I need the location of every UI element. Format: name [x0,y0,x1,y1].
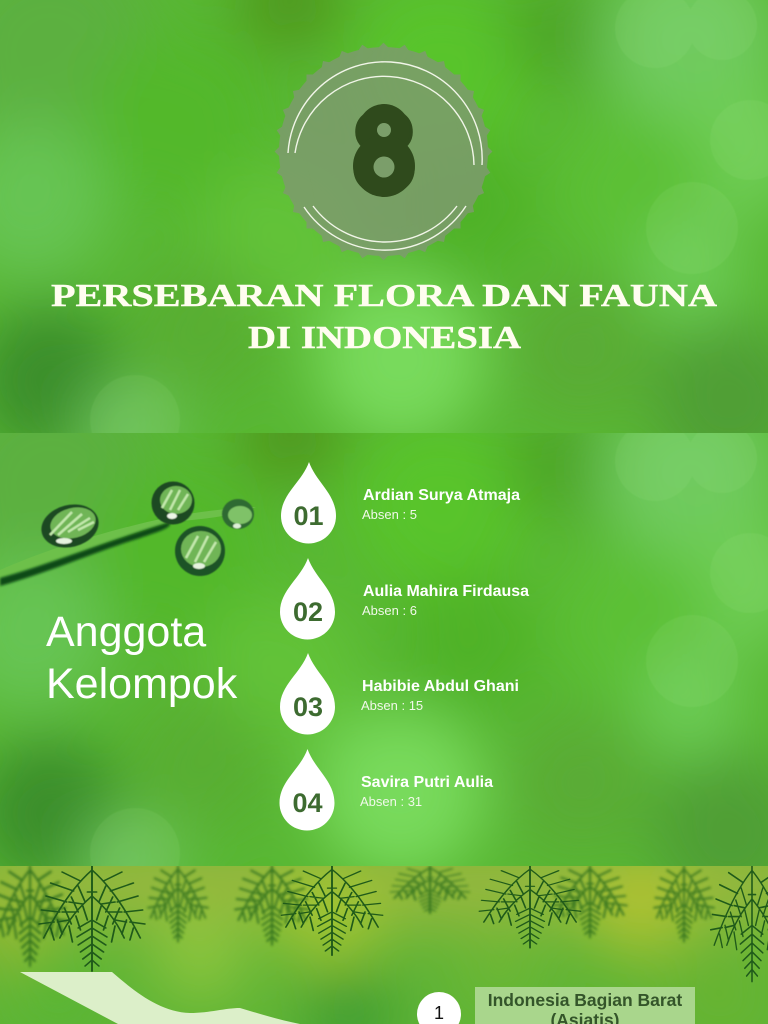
title [51,277,717,355]
member 01: Absen : 5 [362,507,417,522]
panel: persebaran slide [0,836,768,1024]
member 02 [280,558,529,640]
member 04: Absen : 31 [360,794,422,809]
member 03: Absen : 15 [361,698,423,713]
region label box [475,987,695,1024]
panel: anggota kelompok slide [0,373,768,913]
heading: anggota kelompok: Kelompok [46,660,238,708]
heading: anggota kelompok [46,608,238,708]
member 04: Savira Putri Aulia [361,774,493,791]
member 03: 03 [293,692,323,722]
region label box: Indonesia Bagian Barat [488,990,682,1010]
number badge 1: 1 [434,1003,444,1023]
number badge 1 [417,992,461,1024]
badge: number eight seal [275,43,492,260]
member 04: 04 [292,788,323,818]
member 01: 01 [293,501,324,531]
panel: title slide [0,0,768,480]
title: PERSEBARAN FLORA DAN FAUNA [51,277,717,313]
heading: anggota kelompok: Anggota [46,608,206,656]
title: DI INDONESIA [248,319,521,355]
leaf with water droplets [0,482,256,586]
member 01: Ardian Surya Atmaja [363,487,520,504]
ribbon shape [20,972,300,1024]
foreground ferns [39,866,768,982]
member 02: 02 [293,597,323,627]
member 03: Habibie Abdul Ghani [362,678,519,695]
member 03 [280,653,519,734]
member 04 [280,749,493,830]
member 02: Aulia Mahira Firdausa [363,583,529,600]
member 01 [281,462,520,544]
badge: number eight seal: 8 [353,89,415,214]
member 02: Absen : 6 [362,603,417,618]
blurred background ferns [0,866,714,966]
